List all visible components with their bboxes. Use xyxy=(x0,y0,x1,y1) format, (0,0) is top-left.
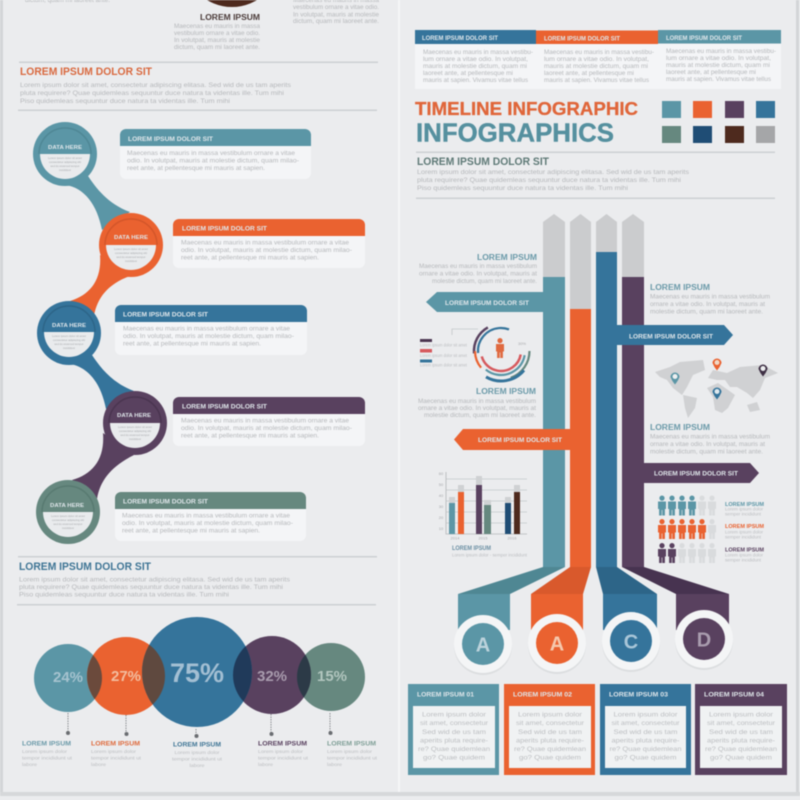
text block: centre: vestibulum ornare a vitae odio. xyxy=(174,31,260,37)
legend: arc chart: Lorem ipsum dolor sit amet xyxy=(420,362,468,368)
icon: brown circle xyxy=(184,0,280,7)
label: lorem ipsum: LOREM IPSUM xyxy=(200,13,260,22)
card: blue xyxy=(115,305,307,355)
text block: lower right of timeline xyxy=(650,423,770,456)
badge: A orange xyxy=(528,614,586,674)
panel: box 03: sit amet, consectetur xyxy=(612,721,680,727)
text block: upper left of timeline: Maecenas eu mauris in massa vestibulum xyxy=(419,264,537,270)
badge: D purple: D xyxy=(697,630,711,652)
text block: upper left of timeline: molestie dictum, quam mi laoreet ante. xyxy=(432,279,537,285)
ribbon: blue xyxy=(596,567,657,630)
text block: upper left of timeline: LOREM IPSUM xyxy=(477,253,537,262)
row: teal people: LOREM IPSUM xyxy=(725,502,764,508)
panel: box 03: Sed wid de us tam xyxy=(614,730,678,736)
chart: bar chart: Lorem ipsum dolor - semper incididunt xyxy=(452,552,528,558)
caption: bar chart: LOREM IPSUM xyxy=(452,546,491,552)
chart: bar chart: 60 xyxy=(439,471,444,476)
caption: teal: labore xyxy=(22,762,38,767)
chart: bar chart: 50 xyxy=(439,482,444,487)
text block: lower left of timeline: ornare a vitae odio. In volutpat, mauris at xyxy=(418,406,536,412)
label: percent: 30% xyxy=(518,341,526,346)
panel: box 04 xyxy=(695,684,787,775)
panel: box 01: go? Quae quidem xyxy=(423,756,485,762)
column 1 xyxy=(415,30,536,84)
value: 75%: 75% xyxy=(170,658,224,688)
column 3 xyxy=(658,30,781,83)
banner: blue xyxy=(617,325,733,345)
caption: purple: Lorem ipsum dolor xyxy=(258,749,304,754)
node: orange: DATA HERE xyxy=(114,235,148,241)
panel: box 02: Lorem ipsum dolor xyxy=(518,712,582,718)
card: purple: LOREM IPSUM DOLOR SIT xyxy=(182,404,267,410)
ribbon: purple xyxy=(622,567,729,630)
chart: bar chart: 20 xyxy=(439,515,444,520)
panel: box 02: go? Quae quidem xyxy=(519,756,581,762)
node: purple: sed do eiusmod tempor xyxy=(120,433,150,437)
card: teal: LOREM IPSUM DOLOR SIT xyxy=(128,137,213,143)
column 1: laoreet ante, at pellentesque mi xyxy=(423,71,513,77)
card: green: reet ante, at pellentesque mi mauris at sapien. xyxy=(122,528,260,534)
section heading: blue xyxy=(17,556,377,606)
card: green: LOREM IPSUM DOLOR SIT xyxy=(123,500,208,506)
node: teal: incididunt xyxy=(59,168,71,172)
chart: winding timeline xyxy=(33,122,167,544)
card: green xyxy=(115,492,306,541)
panel: box 01: Lorem ipsum dolor xyxy=(422,712,486,718)
text block: right: dictum, quam mi laoreet ante. xyxy=(293,19,379,25)
card: green: odio. In volutpat, mauris at molestie dictum, quam milao- xyxy=(122,521,293,527)
card: purple: odio. In volutpat, mauris at molestie dictum, quam milao- xyxy=(181,426,352,432)
node: purple xyxy=(103,391,167,455)
value: 15%: 15% xyxy=(317,668,347,685)
caption: purple: labore xyxy=(258,762,274,767)
text block: lower right of timeline: LOREM IPSUM xyxy=(650,423,710,432)
value: 24%: 24% xyxy=(53,669,83,686)
section heading: right panel: Piso quidemleas sequuntur duce natura ta videntas ille. Tum mihi xyxy=(417,186,628,192)
legend: arc chart: Lorem ipsum dolor sit amet xyxy=(420,342,468,348)
column 2: mauris at molestie dictum, quam mi xyxy=(544,64,648,70)
column 3: lum ornare a vitae odio. In volutpat, xyxy=(666,56,771,62)
connector: blue xyxy=(70,355,134,409)
value: 27%: 27% xyxy=(111,668,141,685)
ribbon: teal xyxy=(458,567,565,630)
text block: upper right of timeline: molestie dictum, quam mi laoreet ante. xyxy=(650,310,763,316)
caption: purple: LOREM IPSUM xyxy=(258,740,307,748)
section heading: blue: LOREM IPSUM DOLOR SIT xyxy=(19,561,151,573)
node: teal: Lorem ipsum dolor sit amet xyxy=(48,156,82,160)
text block: centre: dictum, quam mi laoreet ante. xyxy=(174,45,260,51)
node: purple: Lorem ipsum dolor sit amet xyxy=(118,425,152,429)
node: purple: consectetur adipiscing elit xyxy=(119,429,151,433)
caption: teal: tempor incididunt ut xyxy=(22,756,73,760)
panel: box 04: Sed wid de us tam xyxy=(709,730,773,736)
card: teal: reet ante, at pellentesque mi mauris at sapien. xyxy=(127,166,265,172)
chart: bar chart: 2016 xyxy=(508,536,517,540)
caption: teal: LOREM IPSUM xyxy=(22,740,71,748)
text block: right: vestibulum ornare a vitae odio. xyxy=(293,5,379,11)
banner: purple xyxy=(644,463,759,483)
section heading: right panel: pluta requirere? Quae quidemleas sequuntur duce natura ta videntas ille. Tum mihi xyxy=(417,178,681,184)
card: teal: odio. In volutpat, mauris at molestie dictum, quam milao- xyxy=(127,158,299,164)
panel: box 03: re? Quae quidemlean xyxy=(610,747,682,753)
pin: teal xyxy=(670,372,680,384)
chart: world map with pins xyxy=(655,358,778,418)
badge: D purple xyxy=(675,610,733,670)
panel: box 01: re? Quae quidemlean xyxy=(418,747,490,753)
title: INFOGRAPHICS xyxy=(416,118,614,148)
section heading: orange: LOREM IPSUM DOLOR SIT xyxy=(20,66,152,78)
card: blue: odio. In volutpat, mauris at molestie dictum, quam milao- xyxy=(123,334,294,340)
text block: upper right of timeline: Maecenas eu mauris in massa vestibulum xyxy=(650,294,770,300)
caption: teal: Lorem ipsum dolor xyxy=(22,749,68,754)
panel: box 01 xyxy=(408,684,499,775)
text block: right xyxy=(293,0,380,25)
section heading: orange: Lorem ipsum dolor sit amet, consectetur adipiscing elitasa. Sed wid de us tam aperits xyxy=(20,83,291,89)
card: orange xyxy=(173,219,365,268)
row: orange people: LOREM IPSUM xyxy=(725,524,764,530)
panel: box 04: LOREM IPSUM 04 xyxy=(704,692,765,698)
panel: box 02: aperits pluta require- xyxy=(516,738,584,744)
title: TIMELINE INFOGRAPHIC xyxy=(415,98,638,119)
chart: overlapping percentage circles xyxy=(34,617,365,727)
legend: colour swatches xyxy=(662,101,775,143)
panel: box 04: aperits pluta require- xyxy=(707,738,775,744)
panel: box 03: aperits pluta require- xyxy=(612,738,680,744)
panel: box 02: Sed wid de us tam xyxy=(518,730,582,736)
legend: arc chart: Lorem ipsum dolor sit amet xyxy=(420,353,468,358)
text block: centre: In volutpat, mauris at molestie xyxy=(174,38,261,44)
card: blue: LOREM IPSUM DOLOR SIT xyxy=(123,312,208,318)
banner: blue: LOREM IPSUM DOLOR SIT xyxy=(629,334,713,340)
node: green: sed do eiusmod tempor xyxy=(53,522,83,526)
node: orange: Lorem ipsum dolor sit amet xyxy=(114,247,148,251)
caption: orange: tempor incididunt ut xyxy=(91,756,142,760)
row: teal people: Lorem ipsum dolor xyxy=(725,506,764,512)
column: orange xyxy=(570,214,591,567)
section heading: blue: pluta requirere? Quae quidemleas sequuntur duce natura ta videntas ille. Tum mihi xyxy=(19,585,283,591)
legend: arc chart xyxy=(420,339,468,368)
node: purple: DATA HERE xyxy=(117,413,151,419)
node: orange: sed do eiusmod tempor xyxy=(116,255,146,259)
column 1: mauris at molestie dictum, quam mi xyxy=(423,64,527,70)
column 2: mauris at sapien. Vivamus vitae tellus xyxy=(544,78,649,84)
card: blue: Maecenas eu mauris in massa vestibulum ornare a vitae xyxy=(123,326,291,332)
text block: lower left of timeline xyxy=(418,387,536,419)
caption: purple xyxy=(258,740,309,767)
panel: box 04: sit amet, consectetur xyxy=(707,721,775,727)
column: purple xyxy=(622,214,644,567)
section heading: blue: Piso quidemleas sequuntur duce natura ta videntas ille. Tum mihi xyxy=(19,592,229,598)
column 3: LOREM IPSUM DOLOR SIT xyxy=(666,36,742,42)
text block: lower right of timeline: molestie dictum, quam mi laoreet ante. xyxy=(650,450,763,456)
node: teal: consectetur adipiscing elit xyxy=(49,160,81,164)
section heading: right panel xyxy=(416,152,775,199)
text block: centre: Maecenas eu mauris in massa xyxy=(174,24,261,30)
text block: upper left of timeline: ornare a vitae odio. In volutpat, mauris at xyxy=(419,272,537,278)
caption: green: tempor incididunt ut xyxy=(327,756,378,760)
badge: A teal: A xyxy=(476,634,490,656)
badge: A orange: A xyxy=(550,634,564,656)
pin: purple xyxy=(758,364,768,376)
text block: upper right of timeline: LOREM IPSUM xyxy=(650,283,710,292)
row: purple people xyxy=(658,543,764,563)
column 2: LOREM IPSUM DOLOR SIT xyxy=(544,36,620,42)
panel: box 02: LOREM IPSUM 02 xyxy=(513,692,573,698)
node: green: Lorem ipsum dolor sit amet xyxy=(51,514,85,518)
node: teal: DATA HERE xyxy=(48,145,82,151)
chart: bar chart: 30 xyxy=(439,504,444,509)
node: orange: consectetur adipiscing elit xyxy=(115,251,147,255)
node: blue xyxy=(37,301,101,365)
column 1: lum ornare a vitae odio. In volutpat, xyxy=(423,57,528,63)
row: orange people: Lorem ipsum dolor xyxy=(725,530,764,534)
node: blue: consectetur adipiscing elit xyxy=(53,338,85,342)
caption: green: LOREM IPSUM xyxy=(327,740,376,748)
card: purple: reet ante, at pellentesque mi mauris at sapien. xyxy=(181,434,319,440)
caption: blue: tempor incididunt ut xyxy=(172,756,223,762)
caption: orange xyxy=(91,740,142,767)
chart: four arrow columns xyxy=(426,214,759,630)
caption: teal xyxy=(22,740,73,767)
node: blue: DATA HERE xyxy=(52,323,86,329)
node: orange xyxy=(99,213,163,277)
chart: bar chart: 10 xyxy=(439,526,444,531)
node: blue: incididunt xyxy=(63,346,75,350)
caption: orange: labore xyxy=(91,762,107,767)
column 3: mauris at molestie dictum, quam mi xyxy=(666,63,770,69)
connector: purple xyxy=(72,433,134,499)
connector: teal xyxy=(66,176,130,230)
node: green: consectetur adipiscing elit xyxy=(52,518,84,522)
banner: purple: LOREM IPSUM DOLOR SIT xyxy=(654,472,738,478)
chart: bar chart: 40 xyxy=(439,493,444,498)
title xyxy=(415,98,638,148)
column 2: lum ornare a vitae odio. In volutpat, xyxy=(544,57,649,63)
badge: A teal xyxy=(454,615,512,675)
node: teal: sed do eiusmod tempor xyxy=(50,164,80,168)
section heading: right panel: Lorem ipsum dolor sit amet, consectetur adipiscing elitasa. Sed wid de us tam aperits xyxy=(417,170,689,176)
panel: box 01: sit amet, consectetur xyxy=(420,721,488,727)
panel: box 04: go? Quae quidem xyxy=(710,756,772,762)
section heading: orange: Piso quidemleas sequuntur duce natura ta videntas ille. Tum mihi xyxy=(20,99,230,105)
banner: orange: LOREM IPSUM DOLOR SIT xyxy=(478,438,562,444)
text block: lower left of timeline: Maecenas eu mauris in massa vestibulum xyxy=(418,399,536,405)
column 1: mauris at sapien. Vivamus vitae tellus xyxy=(423,78,528,84)
column: teal xyxy=(543,214,565,567)
panel: box 01: Sed wid de us tam xyxy=(422,730,486,736)
card: teal: Maecenas eu mauris in massa vestibulum ornare a vitae xyxy=(127,151,296,157)
panel: box 02 xyxy=(504,684,595,775)
chart: concentric arcs with person xyxy=(452,309,543,393)
caption: blue: Lorem ipsum dolor xyxy=(174,750,220,755)
caption: blue: LOREM IPSUM xyxy=(173,742,221,748)
row: orange people: semper incididunt xyxy=(725,534,762,540)
banner: teal: LOREM IPSUM DOLOR SIT xyxy=(445,301,529,307)
text block: upper right of timeline: ornare a vitae odio. In volutpat, mauris at xyxy=(650,302,765,308)
panel: box 01: aperits pluta require- xyxy=(420,738,488,744)
panel: box 03: Lorem ipsum dolor xyxy=(614,712,678,718)
connector: orange xyxy=(70,255,130,316)
node: green: incididunt xyxy=(62,526,74,530)
column 2: laoreet ante, at pellentesque mi xyxy=(544,71,634,77)
card: teal xyxy=(120,129,311,179)
column 2 xyxy=(536,30,658,84)
badge: C blue xyxy=(602,612,660,672)
banner: teal xyxy=(426,292,543,312)
card: orange: odio. In volutpat, mauris at molestie dictum, quam milao- xyxy=(181,248,352,254)
card: orange: Maecenas eu mauris in massa vestibulum ornare a vitae xyxy=(181,240,350,246)
panel: box 03: LOREM IPSUM 03 xyxy=(609,692,669,698)
chart: people pictogram xyxy=(658,496,764,563)
text block: centre xyxy=(174,24,261,51)
column 3: mauris at sapien. Vivamus vitae tellus xyxy=(666,77,771,83)
text block: upper right of timeline xyxy=(650,283,770,316)
card: orange: LOREM IPSUM DOLOR SIT xyxy=(182,226,267,232)
text block: lower right of timeline: Maecenas eu mauris in massa vestibulum xyxy=(650,434,770,440)
column 1: Maecenas eu mauris in massa vestibu- xyxy=(423,50,533,56)
column: blue xyxy=(596,214,617,567)
text block: lower left of timeline: LOREM IPSUM xyxy=(476,387,536,396)
column 2: Maecenas eu mauris in massa vestibu- xyxy=(544,50,654,56)
section heading: orange: pluta requirere? Quae quidemleas sequuntur duce natura ta videntas ille. Tum mihi xyxy=(20,91,284,97)
section heading: orange xyxy=(18,62,378,111)
panel: box 04: Lorem ipsum dolor xyxy=(709,712,773,718)
row: teal people: semper incididunt xyxy=(725,512,762,516)
badge: C blue: C xyxy=(624,632,638,654)
caption: green: Lorem ipsum dolor xyxy=(327,749,373,754)
caption: orange: Lorem ipsum dolor xyxy=(91,749,137,754)
node: teal xyxy=(33,122,97,186)
chart: bar chart: 2015 xyxy=(479,536,488,540)
icon: person xyxy=(496,338,504,358)
pin: blue xyxy=(712,388,722,400)
node: green xyxy=(36,480,100,544)
chart: bar chart: 2014 xyxy=(451,536,460,540)
caption: purple: tempor incididunt ut xyxy=(258,756,309,760)
row: purple people: LOREM IPSUM xyxy=(725,548,764,554)
caption: blue xyxy=(172,742,223,768)
card: green: Maecenas eu mauris in massa vestibulum ornare a vitae xyxy=(122,514,291,520)
column 3: laoreet ante, at pellentesque mi xyxy=(666,70,756,76)
panel: box 02: sit amet, consectetur xyxy=(516,721,584,727)
text block: right: In volutpat, mauris at molestie xyxy=(293,12,380,18)
card: orange: reet ante, at pellentesque mi mauris at sapien. xyxy=(181,256,319,262)
chart: bar chart xyxy=(439,471,528,558)
pin: orange xyxy=(712,358,722,370)
row: purple people: semper incididunt xyxy=(725,558,762,562)
banner: orange xyxy=(454,429,570,450)
panel: three column table xyxy=(415,30,781,89)
column 3: Maecenas eu mauris in massa vestibu- xyxy=(666,49,776,55)
ribbon: orange xyxy=(531,567,591,630)
value: 32%: 32% xyxy=(257,668,287,685)
text block: upper left of timeline xyxy=(419,253,537,285)
caption: orange: LOREM IPSUM xyxy=(91,740,140,748)
card: blue: reet ante, at pellentesque mi mauris at sapien. xyxy=(123,342,261,348)
panel: box 01: LOREM IPSUM 01 xyxy=(417,692,475,698)
card: purple xyxy=(173,397,365,446)
panel: top left cropped section xyxy=(25,0,380,51)
section heading: blue: Lorem ipsum dolor sit amet, consectetur adipiscing elitasa. Sed wid de us tam aperits xyxy=(19,578,290,584)
caption: green xyxy=(327,740,378,767)
node: blue: Lorem ipsum dolor sit amet xyxy=(52,334,86,338)
caption: blue: labore xyxy=(190,763,205,768)
panel: box 04: re? Quae quidemlean xyxy=(705,747,777,753)
caption: green: labore xyxy=(327,762,343,767)
text block: lower left of timeline: molestie dictum, quam mi laoreet ante. xyxy=(424,413,536,419)
node: purple: incididunt xyxy=(129,437,141,441)
section heading: right panel: LOREM IPSUM DOLOR SIT xyxy=(417,156,549,168)
node: orange: incididunt xyxy=(125,259,137,263)
text block: lower right of timeline: ornare a vitae odio. In volutpat, mauris at xyxy=(650,442,765,448)
row: teal people xyxy=(658,496,764,516)
row: orange people xyxy=(658,519,764,540)
labels: circle captions xyxy=(22,713,378,768)
node: green: DATA HERE xyxy=(50,503,84,509)
node: blue: sed do eiusmod tempor xyxy=(54,342,84,346)
row: purple people: Lorem ipsum dolor xyxy=(725,552,764,558)
column 1: LOREM IPSUM DOLOR SIT xyxy=(422,36,498,42)
panel: box 02: re? Quae quidemlean xyxy=(514,747,586,753)
panel: box 03: go? Quae quidem xyxy=(614,756,676,762)
card: purple: Maecenas eu mauris in massa vestibulum ornare a vitae xyxy=(181,418,350,424)
panel: box 03 xyxy=(600,684,691,775)
